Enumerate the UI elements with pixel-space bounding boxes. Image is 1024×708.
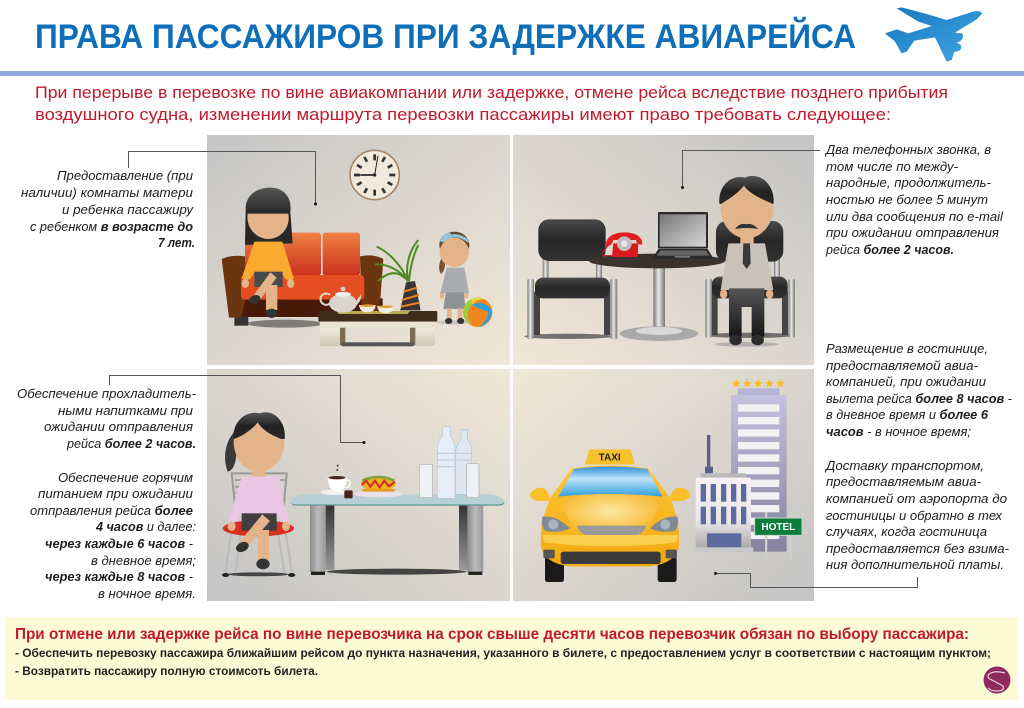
text block: hotel and transport: Доставку транспортом, [824,458,984,473]
text block: mother and child room: с ребенком в возрасте до [30,219,193,234]
text block: hotel and transport: случаях, когда гостиница [826,524,987,539]
waiting chair left [524,219,617,339]
text block: mother and child room: Предоставление (при [57,168,193,183]
text block: hotel and transport: компанией от аэропорта до [826,491,1007,506]
text block: hotel and transport: гостиницы и обратно в тех [826,508,1003,523]
text block: telephone and email: или два сообщения по e-mail [826,209,1004,224]
text block: hotel and transport: предоставляемой авиа- [826,358,978,373]
icon: hotel tower [731,379,787,552]
water bottles and glasses [419,427,479,498]
text block: hotel and transport [824,341,1012,572]
icon: wall clock [350,150,399,200]
text block: telephone and email: ностью не более 5 минут [826,192,988,207]
panel: hotel and taxi [513,369,814,601]
woman sitting [242,188,294,318]
text block: telephone and email: том числе по между- [826,159,958,174]
woman on red chair [222,412,295,577]
text block: telephone and email: Два телефонных звонка, в [824,142,991,157]
text block: hotel and transport: предоставляется без взима- [826,541,1009,556]
leader line: telephone [681,150,820,189]
text block: mother and child room: 7 лет. [158,235,195,250]
text block: hotel and transport: компанией, при ожидании [826,374,986,389]
icon: red telephone [602,232,642,257]
text block: telephone and email [824,142,1004,257]
text block: drinks and hot food: рейса более 2 часов. [66,436,196,451]
glass table [290,494,504,575]
hotel sign: HOTEL [761,522,795,533]
round table [589,254,725,341]
panel: telephone and email [513,135,814,365]
taxi car [529,449,691,582]
text block: drinks and hot food: 4 часов и далее: [95,519,196,534]
notice list: - Возвратить пассажиру полную стоимсоть билета. [15,664,318,678]
intro text: воздушного судна, изменении маршрута перевозки пассажиры имеют право требовать следующее: [35,105,891,124]
panel: drinks and hot food [207,369,510,601]
header divider bar [0,71,1024,76]
panel: bottom notice [5,617,1018,700]
text block: drinks and hot food: в дневное время; [91,553,196,568]
sofa [222,233,383,328]
notice list: - Обеспечить перевозку пассажира ближайшим рейсом до пункта назначения, указанного в билете, с предоставлением услуг в соответствии с настоящим пунктом; [15,646,991,660]
leader line: mother room [128,152,317,206]
leader line: hotel [714,572,918,588]
notice list [15,646,991,678]
coffee table with tea set [318,287,437,346]
text block: hotel and transport: в дневное время и более 6 [826,407,989,422]
text block: telephone and email: рейса более 2 часов. [825,242,954,257]
beach ball [463,298,492,327]
text block: hotel and transport: Размещение в гостинице, [826,341,988,356]
coffee cup [321,465,353,498]
leader line: drinks [110,376,366,444]
text block: drinks and hot food: ожидании отправления [44,419,193,434]
intro text [35,83,948,124]
icon: airplane [885,7,982,62]
text block: drinks and hot food: отправления рейса более [30,503,193,518]
waiting chair right [705,221,795,338]
plant in vase [375,240,421,310]
intro text: При перерыве в перевозке по вине авиакомпании или задержке, отмене рейса вследствие позднего прибытия [35,83,948,102]
text block: telephone and email: при ожидании отправления [826,225,999,240]
text block: drinks and hot food [17,386,196,601]
text block: mother and child room: и ребенка пассажиру [62,202,195,217]
text block: hotel and transport: предоставляемым авиа- [826,474,981,489]
text block: mother and child room: наличии) комнаты матери [21,185,193,200]
taxi car: TAXI [599,452,621,463]
hot dog on plate [354,476,404,497]
hotel sign [755,512,802,560]
notice heading: При отмене или задержке рейса по вине перевозчика на срок свыше десяти часов перевозчик обязан по выбору пассажира: [15,626,969,643]
text block: hotel and transport: вылета рейса более 8 часов - [826,391,1012,406]
girl [437,232,470,324]
icon: laptop [652,212,714,259]
text block: hotel and transport: ния дополнительной платы. [826,557,1004,572]
text block: hotel and transport: часов - в ночное время; [826,424,971,439]
small building [693,435,753,552]
text block: drinks and hot food: Обеспечение горячим [58,470,193,485]
text block: drinks and hot food: в ночное время. [98,586,196,601]
text block: drinks and hot food: ными напитками при [58,403,193,418]
panel: mother and child room [207,135,510,365]
text block: mother and child room [21,168,195,250]
icon: logo [984,666,1010,694]
text block: drinks and hot food: Обеспечение прохладитель- [17,386,196,401]
text block: drinks and hot food: через каждые 8 часов - [45,569,193,584]
text block: drinks and hot food: через каждые 6 часов - [45,536,193,551]
title: ПРАВА ПАССАЖИРОВ ПРИ ЗАДЕРЖКЕ АВИАРЕЙСА [35,16,856,56]
text block: drinks and hot food: питанием при ожидании [38,486,193,501]
man sitting [715,176,778,347]
text block: telephone and email: народные, продолжитель- [826,175,991,190]
